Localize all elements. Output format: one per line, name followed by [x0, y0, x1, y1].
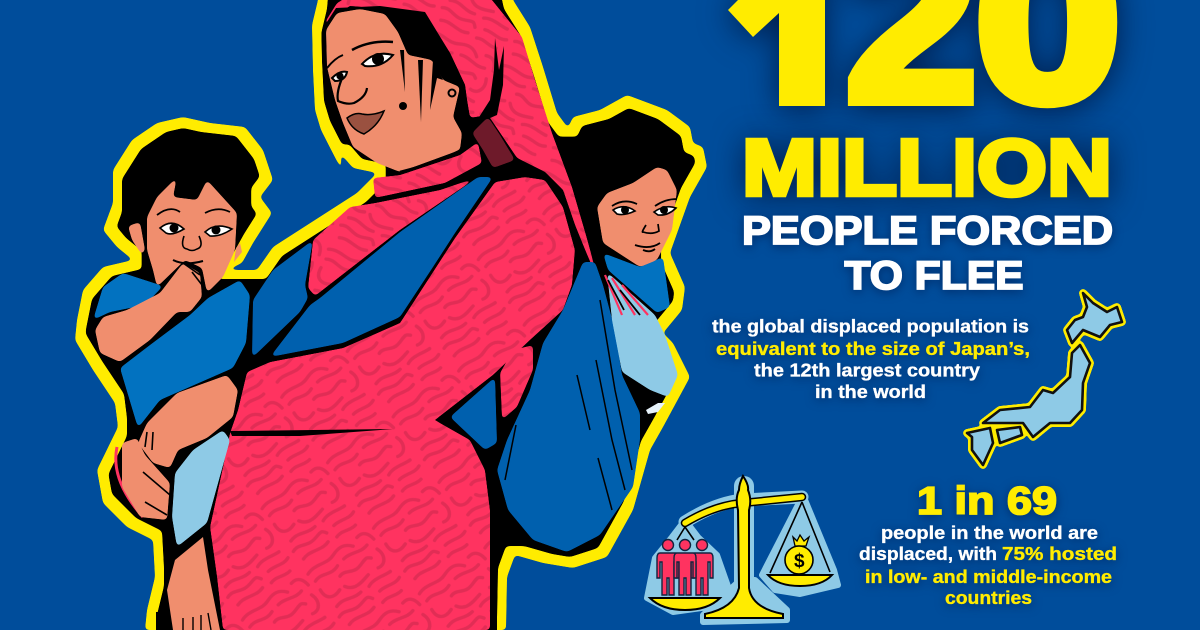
text block: Japan comparison: equivalent to the size of Japan’s, [716, 339, 1030, 359]
strings and left pan [650, 502, 830, 610]
blue triangle fold [450, 377, 497, 450]
white cuff [646, 403, 665, 414]
icon: money bag: $ [794, 551, 805, 572]
blue sash [270, 177, 493, 357]
text block: displacement statistics: displaced, with [859, 544, 997, 564]
pink sliver between dress and bag [500, 345, 533, 420]
subheading: people forced to flee: PEOPLE FORCED [742, 209, 1113, 253]
child's foot [167, 537, 220, 630]
woman's face [326, 9, 462, 172]
text block: displacement statistics: 75% hosted [1002, 544, 1117, 564]
maroon veil shadow [472, 117, 515, 168]
woman's forearm [138, 375, 238, 468]
blue left shoulder [252, 240, 313, 358]
left child's shirt [93, 273, 250, 428]
icon: balance scale with people and money [647, 476, 838, 622]
left child's arm and hand [95, 263, 202, 362]
pink scarf [308, 177, 478, 296]
text block: displacement statistics [859, 523, 1117, 608]
subheading: people forced to flee [742, 209, 1113, 298]
right child's blue shirt [603, 253, 670, 313]
right child's face [597, 167, 677, 267]
right pan [768, 575, 832, 586]
turtleneck collar [373, 142, 482, 198]
carrying bag [497, 262, 640, 552]
child's light-blue leg [172, 430, 230, 547]
text block: Japan comparison: in the world [815, 382, 926, 402]
pink sleeve edge [116, 447, 143, 517]
subheading: people forced to flee: TO FLEE [844, 254, 1024, 298]
text block: Japan comparison [712, 316, 1030, 402]
text block: displacement statistics: countries [945, 588, 1032, 608]
woman's veil [325, 0, 608, 308]
scale post and beam [685, 476, 802, 618]
woman's hand [122, 432, 170, 520]
headline number: 120 [728, 0, 1121, 148]
text block: Japan comparison: the 12th largest country [754, 361, 980, 381]
stat: 1 in 69: 1 in 69 [917, 480, 1057, 523]
veil fold lines [474, 38, 504, 125]
icon: three people [657, 540, 713, 595]
icon: money bag [785, 535, 813, 574]
text block: displacement statistics: people in the world are [881, 523, 1098, 543]
sling scratches [605, 275, 648, 315]
scale halo [647, 486, 838, 622]
left child's face [128, 177, 242, 293]
illustration: mother carrying two children [75, 0, 707, 630]
black line-art base [75, 0, 707, 630]
text block: displacement statistics: in low- and middle-income [865, 567, 1112, 587]
right child's light-blue sleeve [607, 272, 678, 397]
hair strands over face [400, 50, 443, 122]
woman's dress [210, 177, 575, 630]
woman's hair [325, 6, 468, 125]
yellow silhouette outline [75, 0, 707, 630]
text block: Japan comparison: the global displaced population is [712, 316, 1029, 336]
bag fold lines [505, 300, 632, 510]
woman's facial features [327, 42, 465, 172]
icon: map of Japan [967, 293, 1122, 465]
dress fold line [230, 429, 393, 436]
headline: MILLION: MILLION [742, 123, 1112, 212]
